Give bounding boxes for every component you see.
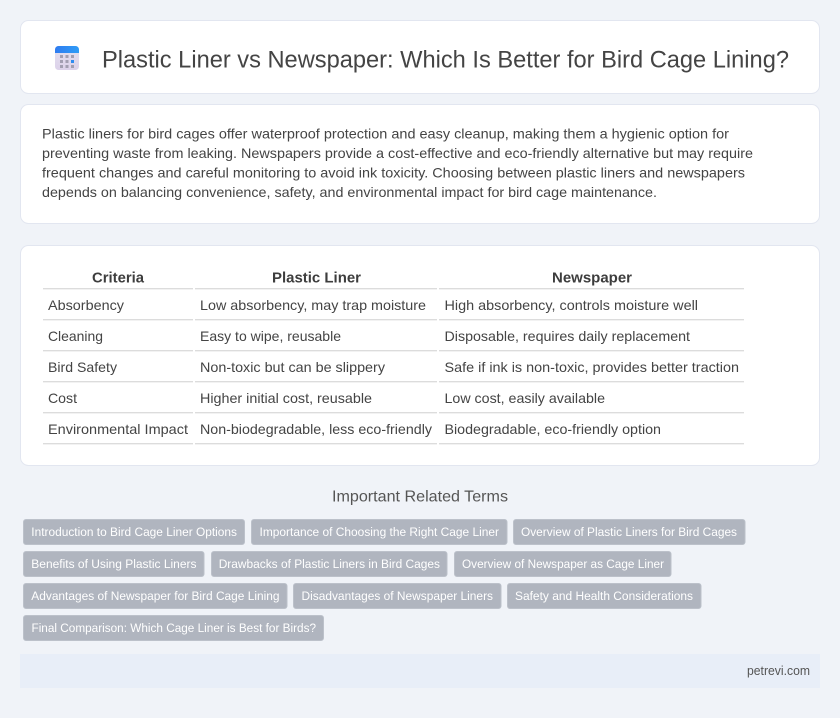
tag	[24, 616, 324, 640]
panel: introduction	[20, 104, 820, 224]
row: environmental impact: Biodegradable, eco-friendly option	[444, 421, 661, 437]
intro paragraph	[42, 126, 753, 200]
row: cost	[48, 390, 605, 406]
row: cleaning: Disposable, requires daily replacement	[444, 328, 690, 344]
row: cost: Low cost, easily available	[444, 390, 605, 406]
row: absorbency: High absorbency, controls moisture well	[444, 297, 698, 313]
intro paragraph: depends on balancing convenience, safety, and environmental impact for bird cage maintenance.	[42, 184, 657, 200]
row: cost: Higher initial cost, reusable	[200, 390, 372, 406]
row: bird safety: Bird Safety	[48, 359, 117, 375]
row: bird safety	[48, 359, 739, 375]
panel: header	[20, 20, 820, 94]
tag	[454, 552, 671, 576]
tag	[24, 584, 287, 608]
row: bird safety: Non-toxic but can be slippery	[200, 359, 385, 375]
heading: important related terms: Important Related Terms	[332, 488, 508, 506]
tag	[24, 552, 204, 576]
intro paragraph: frequent changes and careful monitoring to avoid ink toxicity. Choosing between plastic liners and newspapers	[42, 164, 745, 180]
title: Plastic Liner vs Newspaper: Which Is Better for Bird Cage Lining?	[102, 46, 789, 74]
tag	[508, 584, 701, 608]
tag	[24, 520, 244, 544]
tag	[514, 520, 745, 544]
tag: Advantages of Newspaper for Bird Cage Lining	[31, 589, 280, 603]
panel: comparison table	[20, 246, 820, 466]
row: cost: Cost	[48, 390, 77, 406]
tag: Importance of Choosing the Right Cage Liner	[260, 525, 499, 539]
row: cleaning: Cleaning	[48, 328, 103, 344]
row: environmental impact	[48, 421, 661, 437]
footer	[20, 654, 820, 688]
tag	[294, 584, 501, 608]
row: cleaning: Easy to wipe, reusable	[200, 328, 341, 344]
row: absorbency	[48, 297, 698, 313]
tag: Overview of Plastic Liners for Bird Cages	[521, 525, 737, 539]
row: absorbency: Absorbency	[48, 297, 124, 313]
row: environmental impact: Environmental Impact	[48, 421, 188, 437]
row: absorbency: Low absorbency, may trap moisture	[200, 297, 426, 313]
footer source: petrevi.com	[747, 664, 810, 678]
icon: calendar	[55, 46, 79, 70]
row: cleaning	[48, 328, 690, 344]
tag: Overview of Newspaper as Cage Liner	[462, 557, 664, 571]
table header row: Newspaper	[552, 270, 632, 286]
table header row: Criteria	[92, 270, 145, 286]
tags: related terms	[24, 520, 745, 640]
table header row	[92, 270, 632, 286]
tag: Benefits of Using Plastic Liners	[31, 557, 196, 571]
table rules	[43, 289, 744, 444]
intro paragraph: Plastic liners for bird cages offer waterproof protection and easy cleanup, making them a hygienic option for	[42, 126, 729, 142]
tag: Disadvantages of Newspaper Liners	[302, 589, 493, 603]
tag: Safety and Health Considerations	[515, 589, 693, 603]
tag	[212, 552, 447, 576]
tag	[252, 520, 507, 544]
intro paragraph: preventing waste from leaking. Newspapers provide a cost-effective and eco-friendly alternative but may require	[42, 145, 753, 161]
table header row: Plastic Liner	[272, 270, 361, 286]
row: environmental impact: Non-biodegradable, less eco-friendly	[200, 421, 432, 437]
tag: Final Comparison: Which Cage Liner is Best for Birds?	[32, 621, 316, 635]
tag: Drawbacks of Plastic Liners in Bird Cages	[219, 557, 440, 571]
tag: Introduction to Bird Cage Liner Options	[31, 525, 237, 539]
row: bird safety: Safe if ink is non-toxic, provides better traction	[444, 359, 739, 375]
